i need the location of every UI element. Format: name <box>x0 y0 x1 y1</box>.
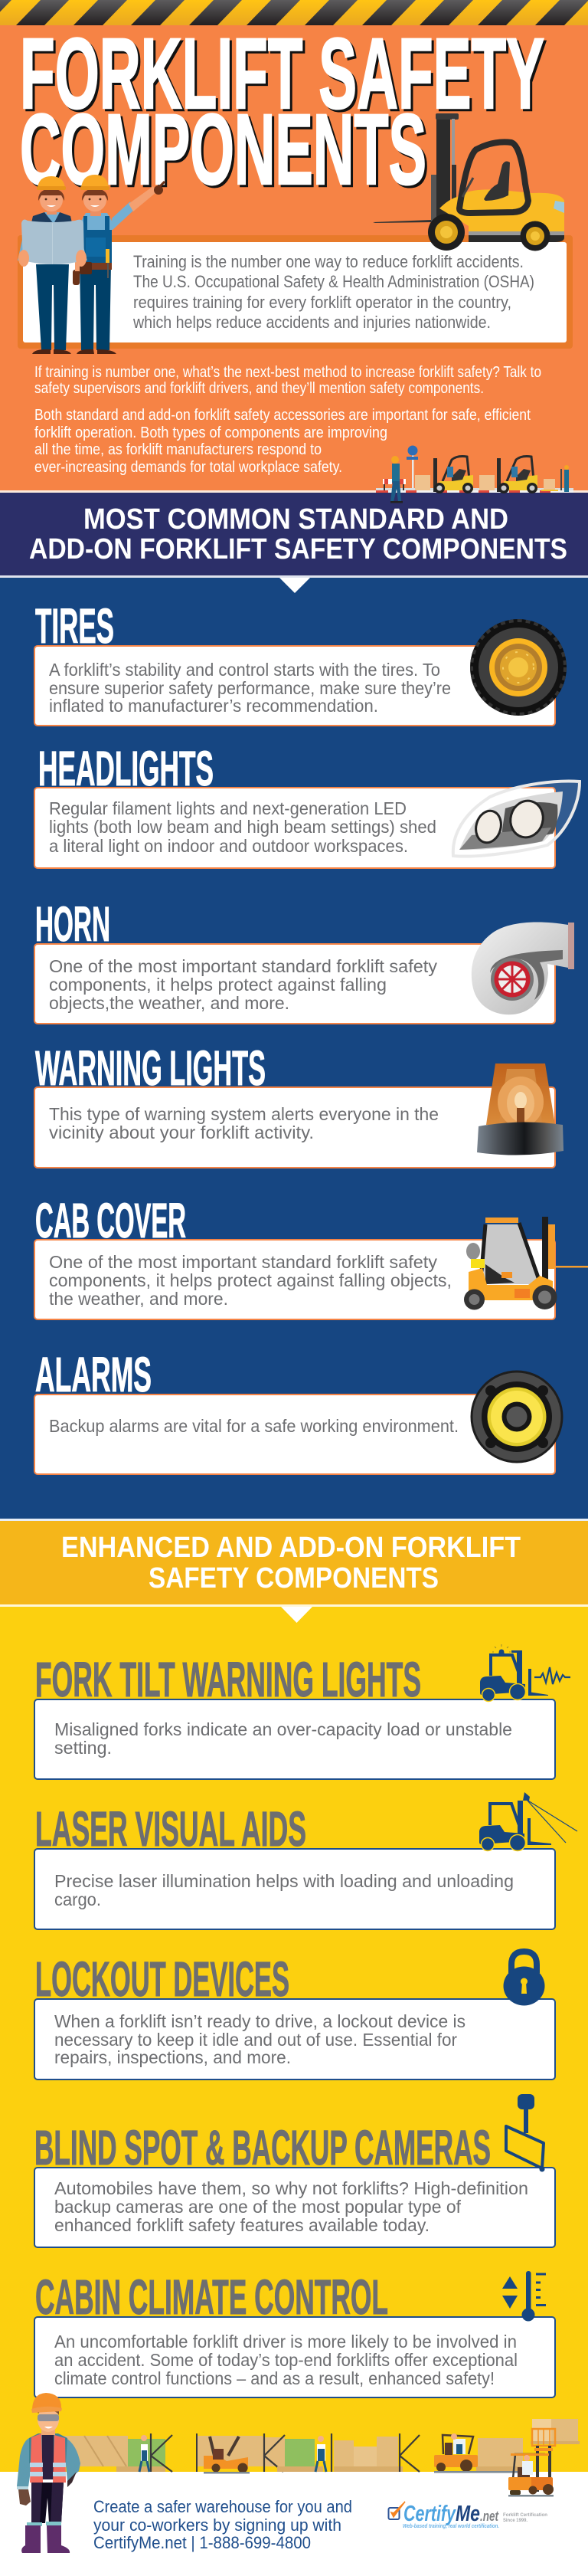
card <box>34 1849 555 1929</box>
panel: navy section header <box>0 490 588 578</box>
arrow: pointer into standard components <box>279 578 310 593</box>
body text: climate control functions – and as a result, enhanced safety! <box>54 2368 495 2388</box>
heading: LASER VISUAL AIDS <box>35 1801 306 1857</box>
icon: thermostat <box>502 2271 546 2322</box>
paragraph: standard and add-on: forklift operation. Both types of components are improving <box>34 424 387 441</box>
call to action text <box>93 2497 352 2552</box>
icon: horn <box>472 922 574 1014</box>
body text: setting. <box>54 1738 112 1758</box>
body text: inflated to manufacturer’s recommendation. <box>49 696 378 716</box>
body text: Precise laser illumination helps with loading and unloading <box>54 1871 514 1891</box>
section heading <box>61 1532 521 1594</box>
icon: backup camera monitor <box>506 2094 545 2171</box>
logo: CertifyMe.net: Me <box>456 2502 480 2526</box>
logo: CertifyMe.net <box>389 2502 547 2529</box>
body text: This type of warning system alerts everyone in the <box>49 1104 439 1124</box>
icon: safety worker <box>17 2393 80 2553</box>
icon: forklift with tilt signal <box>480 1644 570 1701</box>
card <box>34 1395 555 1474</box>
hazard stripe band <box>0 0 588 25</box>
icon: tire <box>470 619 567 716</box>
body text <box>54 1719 512 1758</box>
body text: Automobiles have them, so why not forklifts? High-definition <box>54 2178 528 2198</box>
body text: vicinity about your forklift activity. <box>49 1122 314 1142</box>
body text <box>49 1104 439 1142</box>
paragraph: standard and add-on: all the time, as forklift manufacturers respond to <box>34 441 322 458</box>
icon: warning beacon <box>477 1064 564 1155</box>
body text: necessary to keep it idle and out of use. Essential for <box>54 2030 457 2050</box>
section heading: MOST COMMON STANDARD AND <box>83 503 508 536</box>
body text <box>49 956 437 1013</box>
card <box>34 1240 555 1319</box>
body text: the weather, and more. <box>49 1289 228 1309</box>
body text: repairs, inspections, and more. <box>54 2047 291 2067</box>
panel: tires <box>34 598 567 726</box>
icon: headlight <box>453 782 580 857</box>
icon: forklift with cab <box>464 1217 588 1310</box>
panel: horn <box>34 896 574 1024</box>
icon: yellow forklift <box>373 113 564 251</box>
body text: an accident. Some of today’s top-end forklifts offer exceptional <box>54 2350 518 2370</box>
body text: cargo. <box>54 1889 101 1909</box>
body text: Misaligned forks indicate an over-capacity load or unstable <box>54 1719 512 1739</box>
card <box>34 1699 555 1779</box>
card <box>34 1087 555 1168</box>
logo: CertifyMe.net: .net <box>480 2509 499 2524</box>
heading: WARNING LIGHTS <box>35 1041 266 1096</box>
logo: CertifyMe.net: Forklift Certification <box>503 2512 547 2518</box>
card <box>34 2317 555 2397</box>
section heading: ENHANCED AND ADD-ON FORKLIFT <box>61 1532 521 1564</box>
body text: objects,the weather, and more. <box>49 993 289 1013</box>
panel: blind spot and backup cameras <box>34 2094 555 2247</box>
intro card <box>18 235 573 349</box>
heading: LOCKOUT DEVICES <box>35 1952 289 2007</box>
heading: HORN <box>35 896 110 952</box>
body text: components, it helps protect against falling objects, <box>49 1270 452 1290</box>
intro text: The U.S. Occupational Safety & Health Administration (OSHA) <box>133 272 534 291</box>
heading: HEADLIGHTS <box>38 741 214 796</box>
footer background <box>0 2472 588 2576</box>
section heading <box>29 503 567 565</box>
card <box>34 788 555 868</box>
body text: a literal light on indoor and outdoor workspaces. <box>49 836 408 856</box>
icon: pointing worker <box>73 175 165 354</box>
panel: cab cover <box>34 1193 588 1319</box>
body text: One of the most important standard forklift safety <box>49 1252 437 1272</box>
icon: alarm speaker <box>470 1370 564 1463</box>
body text: enhanced forklift safety features available today. <box>54 2215 430 2235</box>
body text: A forklift’s stability and control starts with the tires. To <box>49 660 440 680</box>
logo: CertifyMe.net: Web-based training, real world certification. <box>403 2522 499 2529</box>
call to action text: your co-workers by signing up with <box>93 2515 341 2535</box>
card <box>34 2168 555 2247</box>
arrow: pointer into enhanced components <box>281 1607 312 1623</box>
body text: One of the most important standard forklift safety <box>49 956 437 976</box>
body text: components, it helps protect against falling <box>49 975 387 995</box>
icon: worker holding plan <box>18 176 87 354</box>
illustration: warehouse strip <box>64 2433 526 2473</box>
panel: headlights <box>34 741 580 868</box>
illustration: forklifts and workers scene <box>376 446 573 503</box>
panel: yellow components background <box>0 1607 588 2472</box>
body text: Backup alarms are vital for a safe working environment. <box>49 1416 459 1436</box>
body text: An uncomfortable forklift driver is more likely to be involved in <box>54 2332 517 2352</box>
title <box>20 17 544 205</box>
body text <box>49 660 451 716</box>
call to action text: Create a safer warehouse for you and <box>93 2497 352 2516</box>
panel: lockout devices <box>34 1952 555 2079</box>
logo: CertifyMe.net: Since 1999. <box>503 2518 528 2523</box>
body text: Regular filament lights and next-generation LED <box>49 798 407 818</box>
heading: CAB COVER <box>35 1193 186 1248</box>
card <box>34 1999 555 2079</box>
body text: backup cameras are one of the most popular type of <box>54 2197 462 2217</box>
intro text: Training is the number one way to reduce forklift accidents. <box>133 252 524 271</box>
body text <box>54 2332 518 2388</box>
body text: lights (both low beam and high beam settings) shed <box>49 817 436 837</box>
panel: alarms <box>34 1347 564 1474</box>
body text: ensure superior safety performance, make sure they’re <box>49 678 451 698</box>
icon: forklift with laser <box>479 1792 577 1851</box>
call to action text: CertifyMe.net | 1-888-699-4800 <box>93 2533 311 2552</box>
heading: ALARMS <box>35 1347 152 1402</box>
section heading: SAFETY COMPONENTS <box>149 1562 439 1594</box>
paragraph: standard and add-on <box>34 407 531 476</box>
panel: orange header <box>0 17 588 490</box>
panel: warning lights <box>34 1041 564 1168</box>
paragraph: standard and add-on: Both standard and add-on forklift safety accessories are important for safe, efficient <box>34 407 531 424</box>
body text <box>54 2011 466 2067</box>
paragraph: next-best method: safety supervisors and forklift drivers, and they’ll mention safety components. <box>34 380 484 397</box>
panel: cabin climate control <box>34 2270 555 2397</box>
body text <box>54 2178 528 2235</box>
heading: TIRES <box>35 598 114 654</box>
logo: CertifyMe.net: Certify <box>403 2502 456 2526</box>
panel: laser visual aids <box>34 1792 577 1929</box>
intro text: requires training for every forklift operator in the country, <box>133 293 511 312</box>
card <box>34 944 555 1024</box>
icon: padlock <box>504 1952 545 2006</box>
paragraph: standard and add-on: ever-increasing demands for total workplace safety. <box>34 459 342 476</box>
body text <box>54 1871 514 1909</box>
paragraph: next-best method <box>34 364 541 397</box>
body text: When a forklift isn’t ready to drive, a lockout device is <box>54 2011 466 2031</box>
body text <box>49 1252 452 1309</box>
body text <box>49 798 436 856</box>
panel: fork tilt warning lights <box>34 1644 570 1779</box>
panel: yellow section header <box>0 1519 588 1607</box>
intro text <box>132 252 534 332</box>
illustration: forklift lifting pallet <box>508 2419 580 2496</box>
intro text: which helps reduce accidents and injuries nationwide. <box>132 313 491 332</box>
card <box>34 646 555 726</box>
panel: blue components background <box>0 578 588 1519</box>
